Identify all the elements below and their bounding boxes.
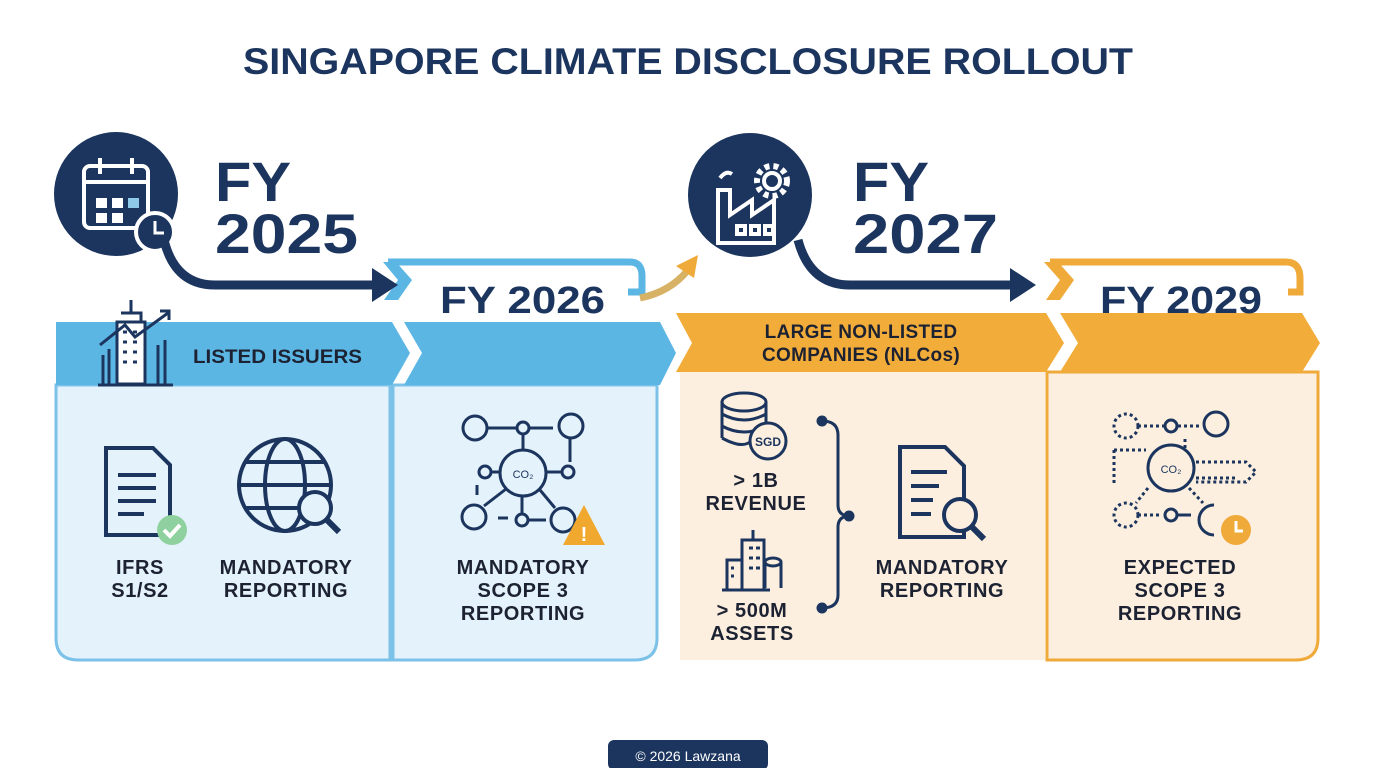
text: expected scope 3: REPORTING [1118,603,1242,625]
text: mandatory reporting: REPORTING [224,580,348,602]
FY 2029 tab [1044,262,1300,322]
text: mandatory reporting: REPORTING [880,580,1004,602]
text: mandatory scope 3: SCOPE 3 [478,580,568,602]
panel: FY2025 listed issuers body [56,385,390,660]
panel: FY2027 NLCo body [680,372,1045,660]
icon: SGD coins [722,393,786,459]
FY 2029 tab: FY 2029 [1100,280,1262,322]
text: large non-listed companies: COMPANIES (NLCos) [762,345,960,366]
text: mandatory scope 3: MANDATORY [457,557,589,579]
icon: scope 3 network: CO₂ [513,469,533,481]
icon: building chart [98,300,173,385]
heading: FY 2027: 2027 [853,202,998,265]
heading: FY 2025: 2025 [215,202,358,265]
text: IFRS: S1/S2 [111,580,169,602]
text: >1B revenue: REVENUE [706,493,806,515]
header band: NLCos [676,313,1320,372]
text: large non-listed companies: LARGE NON-LISTED [765,322,957,343]
FY 2026 tab [383,262,642,322]
icon: SGD coins: SGD [755,435,781,449]
text: mandatory reporting: MANDATORY [220,557,352,579]
icon: globe search [239,439,339,532]
circle: FY2027 factory [688,133,812,257]
FY 2026 tab: FY 2026 [440,280,605,322]
icon: document check [106,448,187,545]
bracket [818,417,853,612]
title: SINGAPORE CLIMATE DISCLOSURE ROLLOUT [243,41,1133,82]
text: >500M assets: ASSETS [710,623,794,645]
icon: clock [1221,515,1251,545]
icon: expected scope3 network: CO₂ [1161,464,1181,476]
text: >1B revenue: > 1B [733,470,779,492]
text: IFRS: IFRS [116,557,164,579]
arrow: 2027 to 2029 [798,240,1036,302]
text: mandatory scope 3: REPORTING [461,603,585,625]
text: listed issuers: LISTED ISSUERS [193,347,362,368]
panel: FY2026 body [393,385,657,660]
heading: FY 2027: FY [853,150,929,213]
text: mandatory reporting: MANDATORY [876,557,1008,579]
icon: warning: ! [581,524,587,546]
panel: FY2029 body [1047,372,1318,660]
icon: scope 3 network [462,414,583,532]
arrow: 2026 to 2027 [640,255,698,298]
icon: warning [563,505,605,546]
footer: © 2026 Lawzana [635,748,741,764]
icon: doc search [900,447,984,539]
heading: FY 2025: FY [215,150,291,213]
text: expected scope 3: SCOPE 3 [1135,580,1225,602]
text: >500M assets: > 500M [717,600,787,622]
icon: buildings [722,530,781,590]
text: expected scope 3: EXPECTED [1124,557,1236,579]
footer [608,740,768,768]
arrow: 2025 to 2026 [164,240,398,302]
circle: FY2025 calendar [54,132,178,256]
icon: expected scope3 network [1114,412,1256,535]
header band: listed issuers [56,300,676,385]
